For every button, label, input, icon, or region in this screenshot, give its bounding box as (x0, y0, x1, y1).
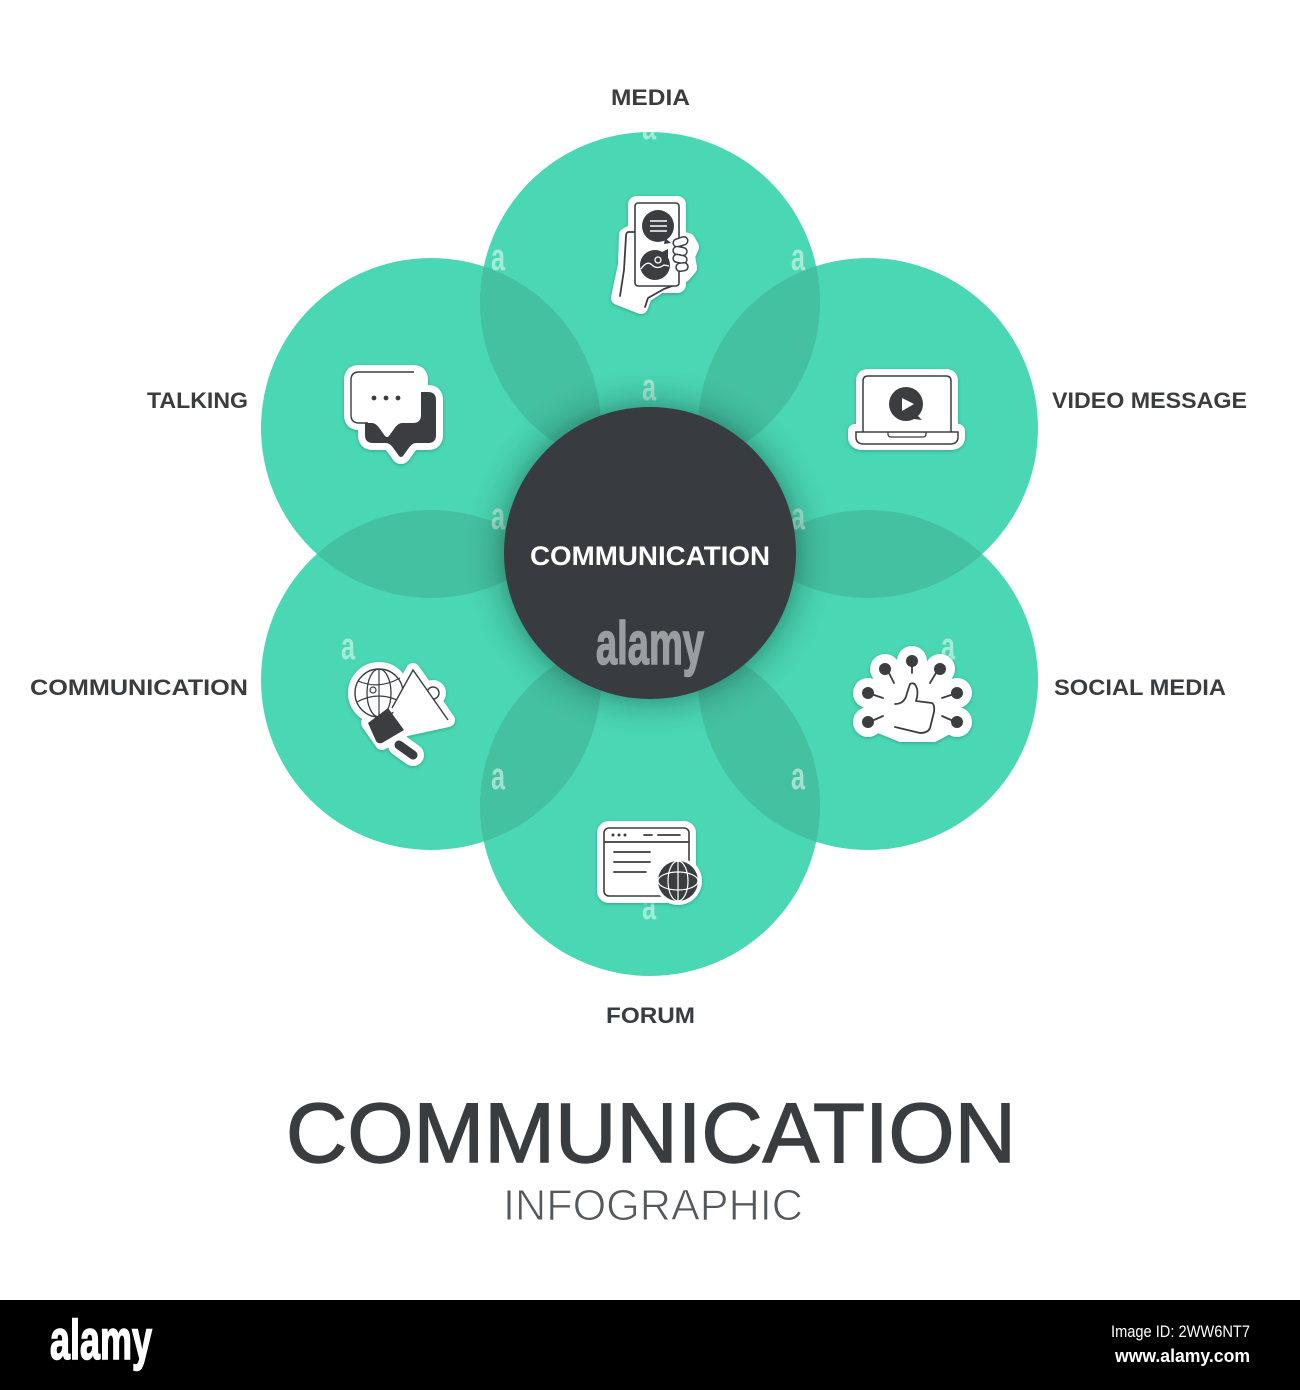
icon: browser window with globe (604, 828, 702, 905)
footer bar (0, 1300, 1300, 1390)
petal: video message (698, 258, 1038, 598)
watermark letters: a (491, 496, 506, 538)
watermark letters: a (642, 106, 657, 148)
label: forum: FORUM (606, 1003, 695, 1028)
petal: media (480, 132, 820, 472)
petal diagram (261, 132, 1038, 976)
petal: talking (261, 258, 601, 598)
hub label: COMMUNICATION (530, 541, 770, 571)
label: media: MEDIA (611, 85, 690, 110)
icon: phone in hand (618, 203, 692, 307)
overlap: talking and media (480, 266, 600, 442)
label: video message: VIDEO MESSAGE (1052, 388, 1247, 413)
footer logo: alamy (50, 1308, 152, 1371)
icon: laptop with play bubble (855, 376, 958, 444)
watermark letters: a (491, 756, 506, 798)
centre shadow (465, 368, 835, 738)
watermark letters: a (491, 237, 506, 279)
icon: globe and megaphone (355, 669, 448, 755)
watermark letters: a (941, 626, 956, 668)
footer url: www.alamy.com (1114, 1346, 1250, 1366)
overlap: media and video message (698, 266, 820, 442)
watermark letters: a (642, 886, 657, 928)
petal: social media (698, 510, 1038, 850)
overlap: communication and talking (317, 510, 506, 598)
label: talking: TALKING (147, 388, 248, 413)
icon: thumbs up network (853, 646, 972, 742)
watermark letters: a (341, 626, 356, 668)
overlap: social media and forum (698, 664, 820, 842)
petal: forum (480, 636, 820, 976)
label: communication: COMMUNICATION (30, 675, 248, 700)
title: COMMUNICATION (286, 1086, 1016, 1180)
icon: speech bubbles (351, 372, 436, 457)
watermark letters: a (791, 237, 806, 279)
footer image id: Image ID: 2WW6NT7 (1111, 1322, 1250, 1341)
overlap: forum and communication (480, 664, 600, 842)
watermark letters: a (791, 496, 806, 538)
overlap: video message and social media (794, 510, 982, 598)
label: social media: SOCIAL MEDIA (1054, 675, 1226, 700)
watermark letters (341, 106, 956, 928)
hub watermark: alamy (596, 610, 704, 677)
petal: communication (261, 510, 601, 850)
watermark letters: a (642, 367, 657, 409)
subtitle: INFOGRAPHIC (503, 1181, 803, 1230)
centre hub (504, 407, 796, 699)
watermark letters: a (791, 756, 806, 798)
